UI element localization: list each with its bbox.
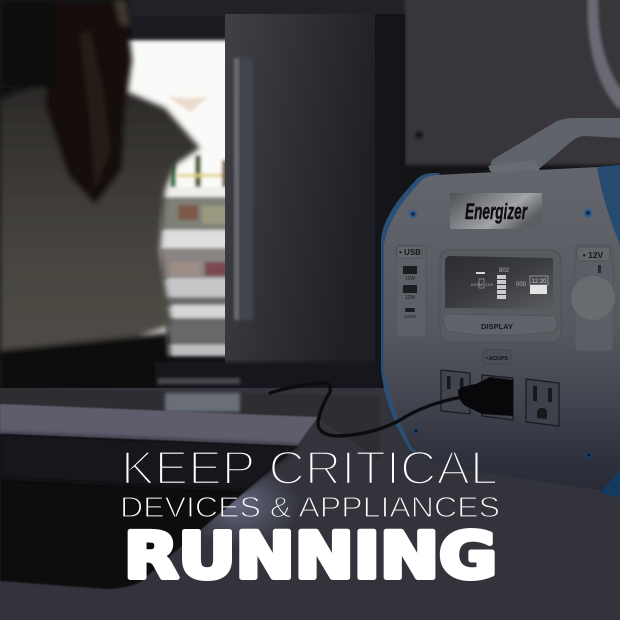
USB panel: 100W [404,314,417,319]
right outlet [526,379,559,426]
power station [381,118,620,497]
AC/UPS label [483,350,511,364]
logo plate: Energizer [465,199,528,224]
screws [409,209,593,459]
floor reflections [155,362,380,392]
left outlet [441,370,470,414]
headline line 1: KEEP CRITICAL [121,441,498,494]
device body [381,165,620,497]
display: 000W 000 [471,283,493,287]
USB panel: 12W [405,276,415,282]
USB panel: 12W [405,295,415,301]
middle outlet [482,375,513,420]
display: 12:20 [531,279,547,285]
logo plate [450,193,542,229]
power cord and plug [270,377,513,436]
12V panel: • 12V [583,250,604,260]
display [440,250,561,342]
display: 802 [499,268,510,274]
countertop and sink [0,388,620,620]
USB panel: • USB [399,248,421,257]
12V panel [571,245,615,351]
display: 000 [516,282,527,288]
open fridge interior [122,40,235,356]
upper cabinets [130,0,620,165]
headline [120,441,500,592]
handle [488,118,620,175]
AC/UPS label: • AC/UPS [486,356,508,362]
fridge door [225,14,405,366]
headline line 3: RUNNING [124,520,497,592]
display: DISPLAY [481,322,513,331]
woman silhouette [0,0,200,395]
USB panel [396,245,426,337]
headline line 2: DEVICES & APPLIANCES [120,492,500,524]
